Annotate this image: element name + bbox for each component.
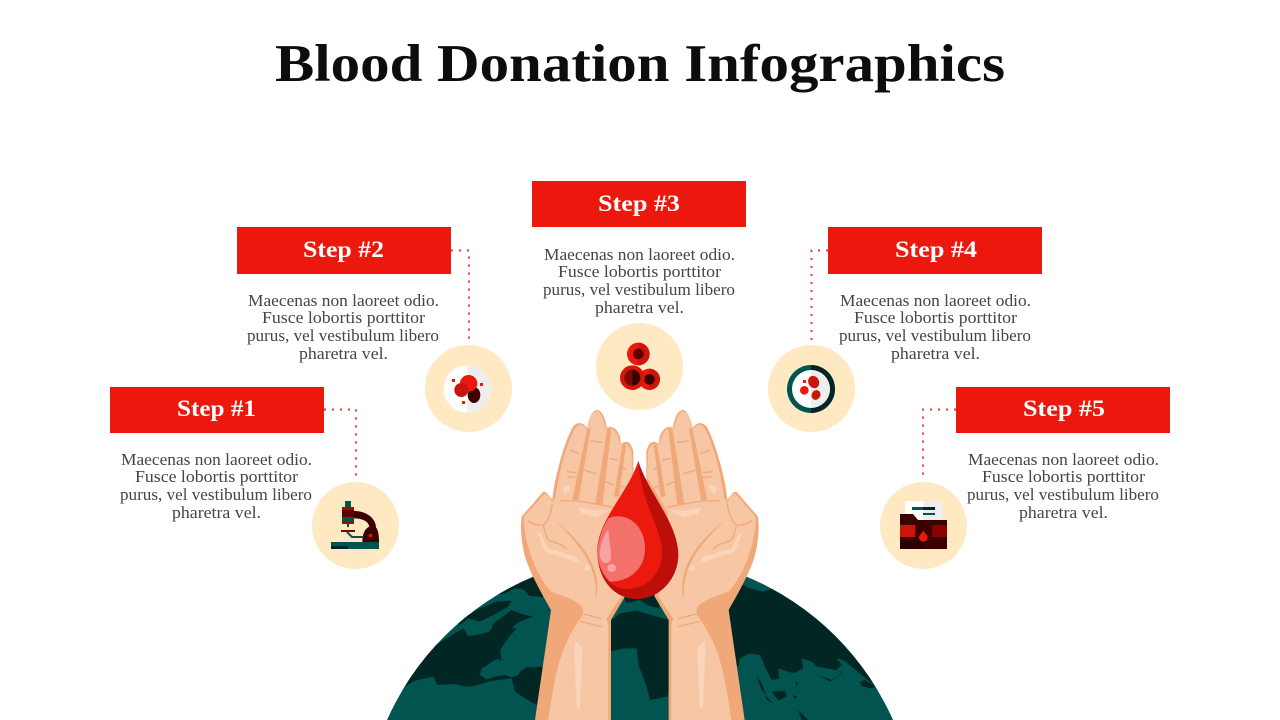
panel: step 4 (828, 227, 1042, 363)
panel: step 3: Step #3 (598, 191, 680, 216)
left hand (521, 410, 633, 720)
title: Blood Donation Infographics (275, 35, 1005, 93)
panel: step 4: Fusce lobortis porttitor (854, 308, 1017, 327)
panel: step 1 (110, 387, 324, 522)
icon: blood cells on slide (425, 345, 512, 432)
panel: step 4: Step #4 (895, 237, 978, 262)
panel: step 3: purus, vel vestibulum libero (543, 280, 735, 299)
panel: step 4: pharetra vel. (891, 344, 980, 363)
continents: centre (610, 611, 673, 700)
panel: step 5: Maecenas non laoreet odio. (968, 450, 1159, 469)
panel: step 1: pharetra vel. (172, 503, 261, 522)
panel: step 2 (237, 227, 451, 363)
panel: step 2: Maecenas non laoreet odio. (248, 291, 439, 310)
panel: step 1: Step #1 (177, 396, 256, 421)
continents: right (728, 585, 876, 720)
globe (387, 576, 893, 720)
connector: step 2 to icon (451, 250, 469, 340)
continents: left (404, 576, 544, 705)
panel: step 4: Maecenas non laoreet odio. (840, 291, 1031, 310)
panel: step 4: purus, vel vestibulum libero (839, 326, 1031, 345)
panel: step 3: pharetra vel. (595, 298, 684, 317)
panel: step 1: purus, vel vestibulum libero (120, 485, 312, 504)
panel: step 5: Step #5 (1023, 396, 1105, 421)
panel: step 5: purus, vel vestibulum libero (967, 485, 1159, 504)
panel: step 3: Fusce lobortis porttitor (558, 262, 721, 281)
panel: step 2: pharetra vel. (299, 344, 388, 363)
panel: step 5 (956, 387, 1170, 522)
panel: step 2: Fusce lobortis porttitor (262, 308, 425, 327)
connector: step 4 to icon (812, 250, 828, 340)
panel: step 3: Maecenas non laoreet odio. (544, 245, 735, 264)
icon: petri dish (768, 345, 855, 432)
panel: step 5: Fusce lobortis porttitor (982, 467, 1145, 486)
panel: step 2: purus, vel vestibulum libero (247, 326, 439, 345)
icon: red blood cells (596, 323, 683, 410)
panel: step 2: Step #2 (303, 237, 384, 262)
panel: step 3 (532, 181, 746, 317)
panel: step 1: Fusce lobortis porttitor (135, 467, 298, 486)
hand highlights (538, 485, 610, 708)
finger lines (555, 428, 626, 600)
connector: step 5 to icon (923, 410, 956, 476)
icon: microscope (312, 482, 399, 569)
panel: step 5: pharetra vel. (1019, 503, 1108, 522)
right hand (646, 410, 759, 720)
illustration: globe with hands and blood drop (380, 410, 903, 720)
connector: step 1 to icon (324, 410, 356, 476)
blood drop (597, 461, 678, 599)
panel: step 1: Maecenas non laoreet odio. (121, 450, 312, 469)
icon: medical folder (880, 482, 967, 569)
